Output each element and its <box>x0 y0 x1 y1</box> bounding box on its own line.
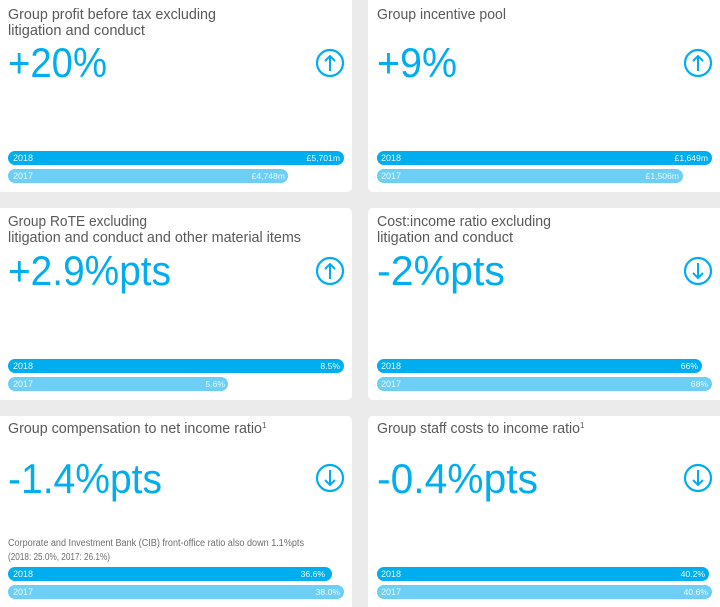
heading: group compensation ratio: Group compensation to net income ratio <box>8 421 262 437</box>
bar 2017: 2017 <box>13 171 33 181</box>
heading: group RoTE: Group RoTE excluding <box>8 214 147 230</box>
heading: group profit before tax: litigation and conduct <box>8 23 145 39</box>
heading: group staff costs ratio: 1 <box>580 421 585 430</box>
note: CIB front-office ratio <box>8 538 304 563</box>
heading: group RoTE <box>8 214 301 246</box>
bar 2018: 2018 <box>13 153 33 163</box>
bar 2018 <box>8 151 344 165</box>
bar 2017 <box>8 377 228 391</box>
heading: group RoTE: litigation and conduct and other material items <box>8 230 301 246</box>
bar 2018 <box>377 359 702 373</box>
bar 2017: 2017 <box>381 379 401 389</box>
bar 2017: 68% <box>691 379 708 389</box>
bar 2018: £5,701m <box>307 153 340 163</box>
bar 2018: 36.6% <box>301 569 325 579</box>
bar 2018: 2018 <box>381 153 401 163</box>
heading: cost income ratio <box>377 214 551 246</box>
bar 2018: 40.2% <box>681 569 705 579</box>
bar 2017 <box>8 169 288 183</box>
bar 2017 <box>377 585 712 599</box>
bar 2018: £1,649m <box>675 153 708 163</box>
icon: down arrow <box>685 465 711 491</box>
bar 2018: 2018 <box>381 361 401 371</box>
bar 2017: 2017 <box>381 587 401 597</box>
icon: down arrow <box>317 465 343 491</box>
headline figure: -1.4%pts <box>8 455 162 502</box>
panel: group incentive pool <box>368 0 720 192</box>
heading: group incentive pool: Group incentive pool <box>377 7 506 23</box>
bar 2017: £1,506m <box>646 171 679 181</box>
bar 2018 <box>377 151 712 165</box>
panel: group staff costs ratio <box>368 416 720 607</box>
bar 2017: £4,748m <box>252 171 285 181</box>
panel: group RoTE <box>0 208 352 400</box>
bar 2018: 2018 <box>13 361 33 371</box>
bar 2017: 2017 <box>13 587 33 597</box>
headline figure: +9% <box>377 39 457 86</box>
icon: up arrow <box>685 50 711 76</box>
bar 2018 <box>8 567 332 581</box>
bar 2018: 66% <box>681 361 698 371</box>
panel: group compensation ratio <box>0 416 352 607</box>
icon: down arrow <box>685 258 711 284</box>
bar 2017: 38.0% <box>316 587 340 597</box>
bar 2018: 2018 <box>13 569 33 579</box>
heading: group compensation ratio: 1 <box>262 421 267 430</box>
panel: group profit before tax <box>0 0 352 192</box>
icon: up arrow <box>317 258 343 284</box>
headline figure: -2%pts <box>377 247 505 294</box>
heading: group staff costs ratio: Group staff costs to income ratio <box>377 421 580 437</box>
bar 2017: 2017 <box>13 379 33 389</box>
headline figure: +2.9%pts <box>8 247 171 294</box>
icon: up arrow <box>317 50 343 76</box>
heading: cost income ratio: litigation and conduct <box>377 230 513 246</box>
note: CIB front-office ratio: (2018: 25.0%, 2017: 26.1%) <box>8 552 110 563</box>
heading: group profit before tax <box>8 7 216 39</box>
headline figure: -0.4%pts <box>377 455 538 502</box>
panel: cost income ratio <box>368 208 720 400</box>
bar 2017 <box>8 585 344 599</box>
heading: cost income ratio: Cost:income ratio excluding <box>377 214 551 230</box>
bar 2018 <box>377 567 709 581</box>
bar 2018 <box>8 359 344 373</box>
bar 2017 <box>377 169 683 183</box>
note: CIB front-office ratio: Corporate and Investment Bank (CIB) front-office ratio also down 1.1%pts <box>8 538 304 549</box>
heading: group profit before tax: Group profit before tax excluding <box>8 7 216 23</box>
bar 2018: 8.5% <box>320 361 340 371</box>
bar 2018: 2018 <box>381 569 401 579</box>
bar 2017 <box>377 377 712 391</box>
bar 2017: 40.6% <box>684 587 708 597</box>
bar 2017: 5.6% <box>205 379 225 389</box>
headline figure: +20% <box>8 39 107 86</box>
bar 2017: 2017 <box>381 171 401 181</box>
